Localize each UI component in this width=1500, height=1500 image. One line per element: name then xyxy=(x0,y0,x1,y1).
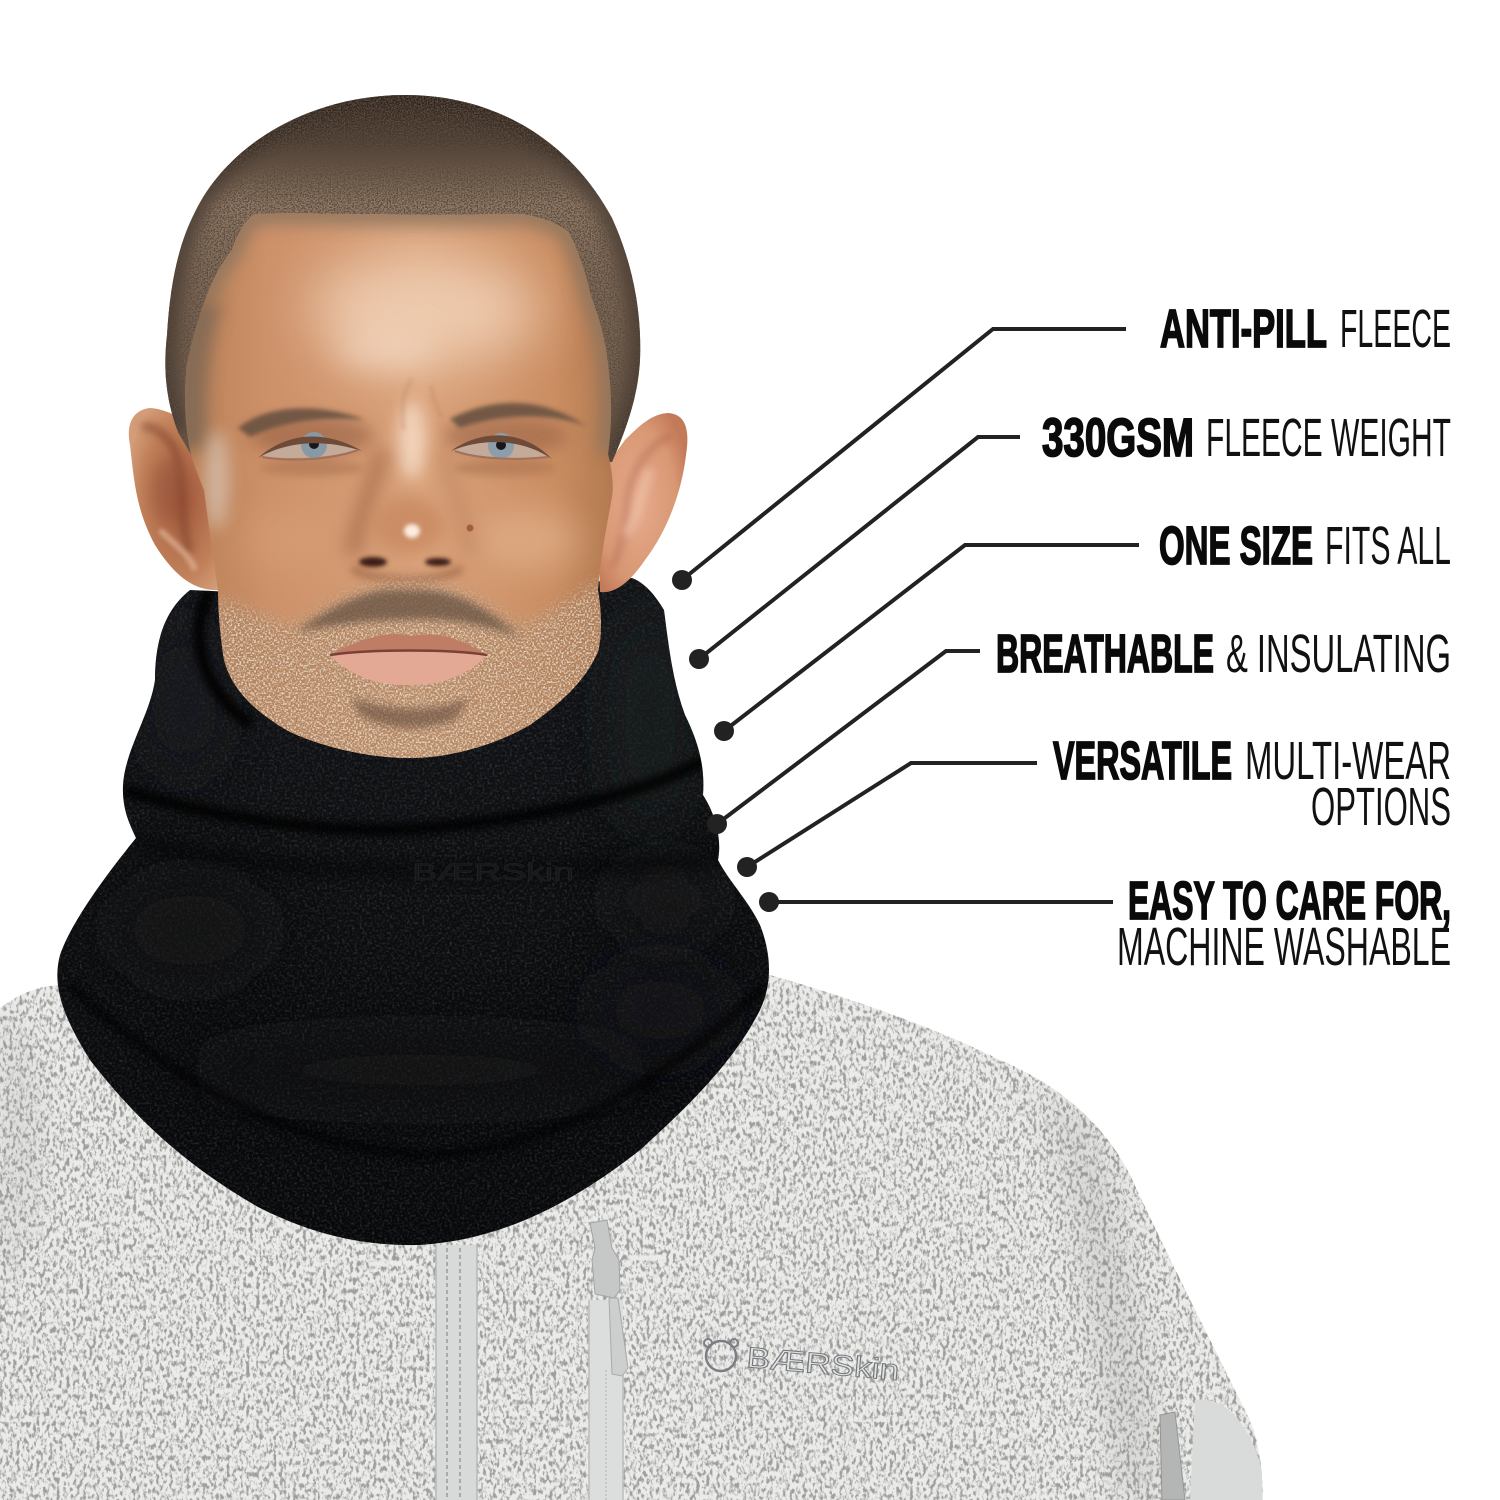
temple hair fade xyxy=(189,300,205,450)
neck warmer embroidered logo: BÆRSkin xyxy=(412,859,574,886)
chest pocket zip xyxy=(589,1300,623,1500)
short hair xyxy=(160,90,650,475)
callout: 330gsm fleece weight xyxy=(689,408,1451,669)
face xyxy=(180,200,620,775)
callout: one size fits all xyxy=(714,516,1451,741)
left ear xyxy=(129,408,225,590)
callout: one size fits all: ONE SIZE xyxy=(1159,516,1313,576)
right ear xyxy=(596,413,687,592)
leader line 5 xyxy=(737,763,1037,877)
fold shadows xyxy=(70,590,765,1155)
callout: breathable and insulating xyxy=(707,624,1451,834)
callout: versatile multi-wear options: VERSATILE xyxy=(1053,731,1232,791)
left eye xyxy=(258,432,362,460)
sweater brand logo: BÆRSkin xyxy=(745,1342,901,1387)
left eyebrow xyxy=(238,408,365,437)
callout: versatile multi-wear options xyxy=(737,731,1451,877)
forehead frown lines xyxy=(400,380,434,430)
sleeve pocket zip and patch xyxy=(1160,1399,1262,1500)
leader line 4 xyxy=(707,651,980,834)
under-eye shadow xyxy=(260,460,364,476)
mouth xyxy=(330,634,487,685)
nose xyxy=(352,400,474,580)
hairline fade xyxy=(205,213,611,454)
forehead highlight xyxy=(310,255,540,365)
fleece neck warmer xyxy=(40,570,790,1260)
callout: anti-pill fleece: ANTI-PILL xyxy=(1160,299,1327,359)
stubble beard xyxy=(218,574,601,758)
fold highlights xyxy=(110,610,730,1106)
right eyebrow xyxy=(450,403,586,428)
leader line 6 xyxy=(759,892,1113,912)
grey knit sweater xyxy=(0,960,1280,1500)
right eye xyxy=(451,433,552,459)
leader line 2 xyxy=(689,437,1020,669)
leader line 3 xyxy=(714,545,1139,741)
pale temple patch xyxy=(205,430,229,530)
sweater brand logo xyxy=(703,1338,898,1381)
callout: 330gsm fleece weight: 330GSM xyxy=(1042,408,1194,468)
eye socket shadows xyxy=(250,416,374,456)
zip pull xyxy=(590,1220,628,1376)
callout: easy to care for, machine washable xyxy=(759,871,1451,977)
cheek tone xyxy=(245,508,345,572)
callout: breathable and insulating: BREATHABLE xyxy=(996,624,1214,684)
callout: anti-pill fleece xyxy=(672,299,1451,590)
main zip tape xyxy=(436,1245,477,1500)
leader line 1 xyxy=(672,329,1126,590)
